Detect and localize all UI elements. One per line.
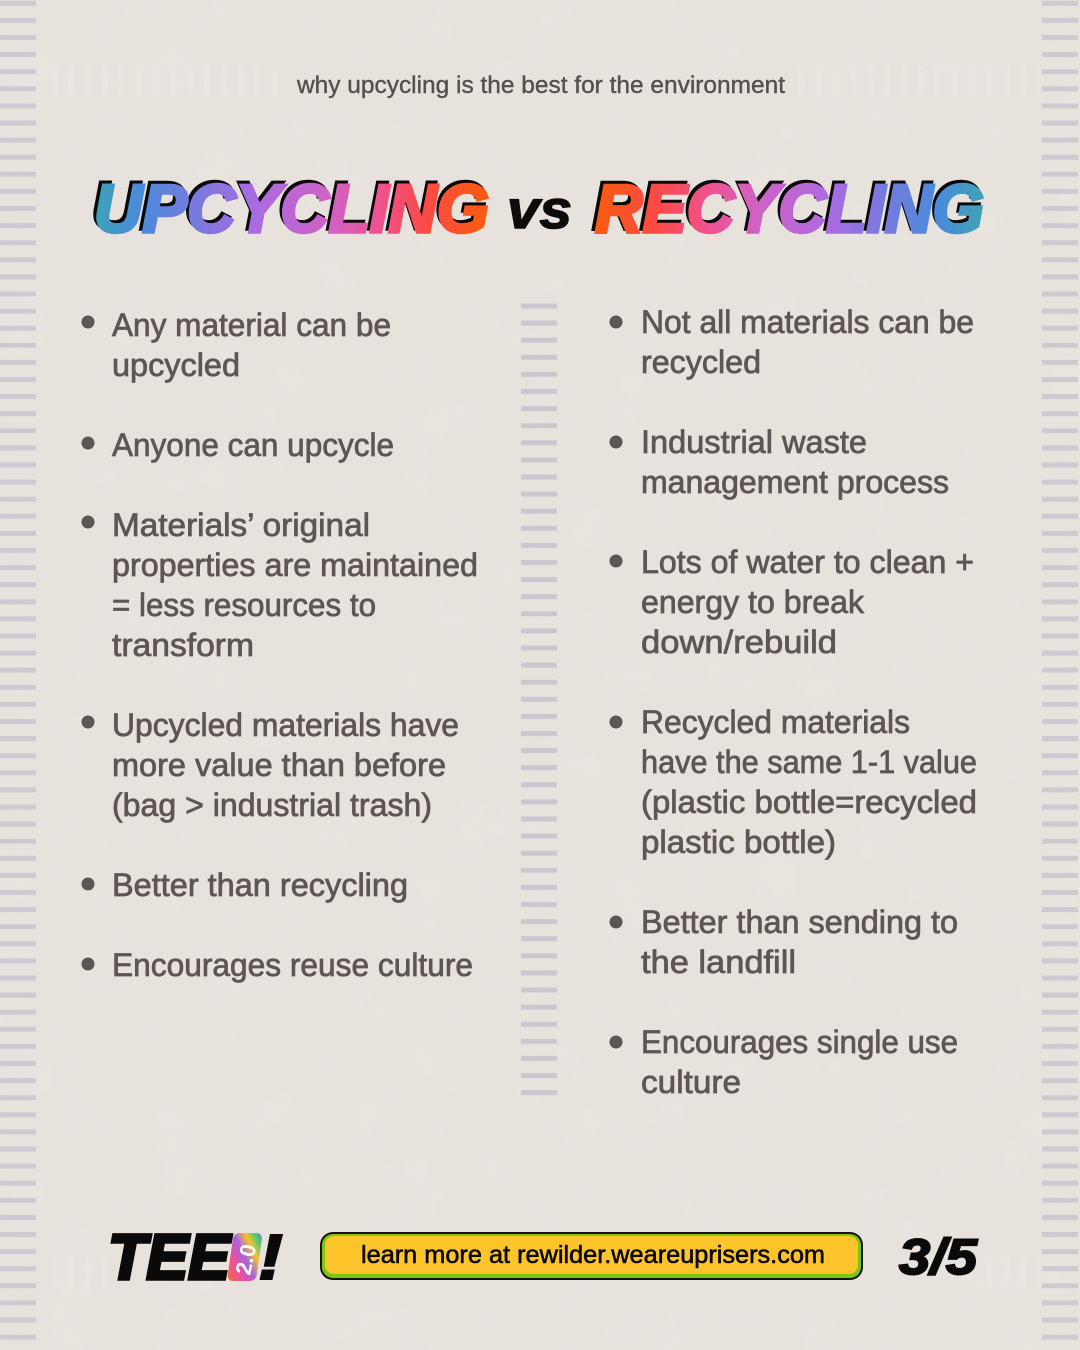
- page number: 3/5: [899, 1229, 978, 1285]
- bullet item: landfill: [610, 904, 958, 980]
- centre divider stripes: [521, 303, 557, 1097]
- bullet item: original properties: [82, 507, 478, 663]
- bullet item: landfill: Better than sending to: [641, 904, 958, 940]
- call to action button: learn more at rewilder.weareuprisers.com: [361, 1241, 825, 1269]
- panel: recycling list: [610, 304, 977, 1100]
- bullet item: more value: [82, 707, 459, 823]
- bullet item: more value: Upcycled materials have: [112, 707, 459, 743]
- bullet item: industrial waste: management process: [641, 464, 949, 500]
- bullet item: original properties: properties are maintained: [112, 547, 478, 583]
- bullet item: same value: have the same 1-1 value: [641, 744, 977, 780]
- icon: rainbow 2.0 badge: 2.0: [230, 1242, 261, 1277]
- bullet item: water and energy: Lots of water to clean +: [641, 544, 974, 580]
- title word: vs: vs: [507, 180, 572, 240]
- title word: recycling: RECYCLING: [592, 168, 982, 244]
- bullet item: single use: [610, 1024, 958, 1100]
- bullet item: more value: (bag > industrial trash): [112, 787, 432, 823]
- bullet item: water and energy: energy to break: [641, 584, 865, 620]
- title word: upcycling: UPCYCLING: [91, 168, 487, 244]
- panel: upcycling list: [82, 307, 478, 983]
- bullet item: landfill: the landfill: [641, 944, 796, 980]
- logo: TEE 2.0: !: [258, 1221, 283, 1293]
- bullet item: not all materials: Not all materials can be: [641, 304, 974, 340]
- bullet item: more value: more value than before: [112, 747, 446, 783]
- bullet item: same value: Recycled materials: [641, 704, 910, 740]
- left edge stripes: [0, 0, 36, 1350]
- bullet item: same value: plastic bottle): [641, 824, 836, 860]
- bullet item: any material: [82, 307, 391, 383]
- bullet item: water and energy: down/rebuild: [641, 624, 837, 660]
- bullet item: water and energy: [610, 544, 974, 660]
- bullet item: any material: upcycled: [112, 347, 240, 383]
- bullet item: reuse culture: Encourages reuse culture: [112, 947, 473, 983]
- bullet item: anyone: Anyone can upcycle: [112, 427, 394, 463]
- right edge stripes: [1042, 0, 1078, 1350]
- bullet item: original properties: Materials’ original: [112, 507, 370, 543]
- icon: rainbow 2.0 badge: [227, 1233, 263, 1281]
- bullet item: better than recycling: Better than recycling: [112, 867, 408, 903]
- bullet item: not all materials: [610, 304, 974, 380]
- subtitle: why upcycling is the best for the environment: [296, 72, 785, 99]
- bullet item: single use: Encourages single use: [641, 1024, 958, 1060]
- bullet item: industrial waste: Industrial waste: [641, 424, 867, 460]
- bullet item: single use: culture: [641, 1064, 741, 1100]
- title word: upcycling: UPCYCLING: [94, 171, 489, 247]
- bullet item: same value: [610, 704, 977, 860]
- bullet item: original properties: = less resources to: [112, 587, 376, 623]
- bullet item: any material: Any material can be: [112, 307, 391, 343]
- title: [91, 168, 984, 247]
- logo: TEE 2.0: TEE: [108, 1221, 232, 1293]
- bullet item: industrial waste: [610, 424, 949, 500]
- title word: recycling: RECYCLING: [595, 171, 984, 247]
- bullet item: same value: (plastic bottle=recycled: [641, 784, 977, 820]
- bullet item: not all materials: recycled: [641, 344, 761, 380]
- bullet item: original properties: transform: [112, 627, 254, 663]
- call to action button: [320, 1232, 863, 1280]
